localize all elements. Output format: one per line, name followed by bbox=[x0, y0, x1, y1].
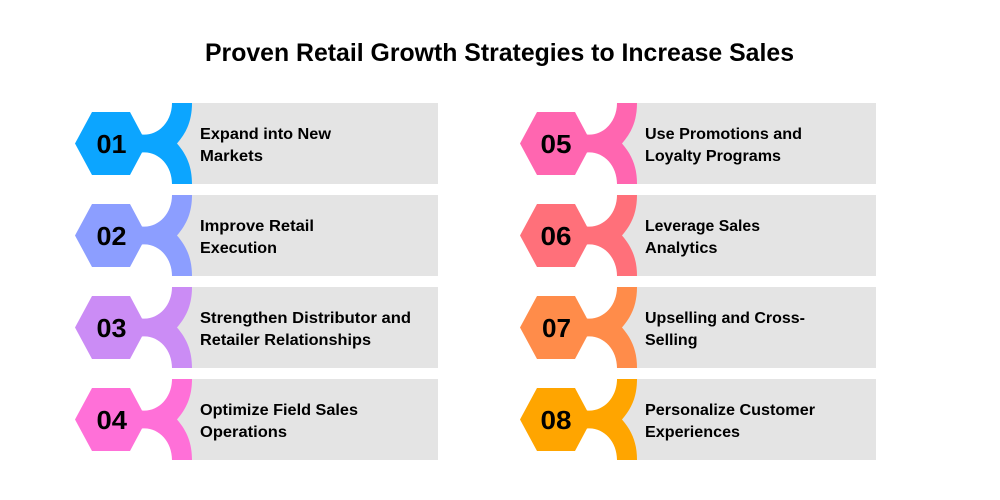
item 03: Retailer Relationships bbox=[200, 332, 371, 349]
item 02: 02 bbox=[96, 221, 126, 251]
item 06 bbox=[520, 195, 876, 276]
item 01 bbox=[75, 103, 438, 184]
item 08: Experiences bbox=[645, 424, 740, 441]
item 04: Operations bbox=[200, 424, 287, 441]
item 01: 01 bbox=[96, 129, 126, 159]
item 07: Selling bbox=[645, 332, 698, 349]
item 04 bbox=[75, 379, 438, 460]
item 03: Strengthen Distributor and bbox=[200, 310, 411, 327]
item 04: Optimize Field Sales bbox=[200, 402, 358, 419]
item 05: Use Promotions and bbox=[645, 126, 802, 143]
item 02: Execution bbox=[200, 240, 277, 257]
item 03 bbox=[75, 287, 438, 368]
item 06: Leverage Sales bbox=[645, 218, 760, 235]
item 05: 05 bbox=[540, 129, 572, 159]
item 07: 07 bbox=[542, 313, 571, 343]
title: Proven Retail Growth Strategies to Increase Sales bbox=[205, 39, 794, 67]
item 07: Upselling and Cross- bbox=[645, 310, 805, 327]
item 07 bbox=[520, 287, 876, 368]
item 08: Personalize Customer bbox=[645, 402, 815, 419]
item 02: Improve Retail bbox=[200, 218, 314, 235]
item 03: 03 bbox=[96, 313, 126, 343]
item 06: 06 bbox=[540, 221, 572, 251]
item 01: Markets bbox=[200, 148, 263, 165]
item 01: Expand into New bbox=[200, 126, 332, 143]
item 04: 04 bbox=[96, 405, 128, 435]
item 06: Analytics bbox=[645, 240, 718, 257]
item 08 bbox=[520, 379, 876, 460]
item 05 bbox=[520, 103, 876, 184]
item 08: 08 bbox=[540, 405, 572, 435]
item 02 bbox=[75, 195, 438, 276]
item 05: Loyalty Programs bbox=[645, 148, 781, 165]
